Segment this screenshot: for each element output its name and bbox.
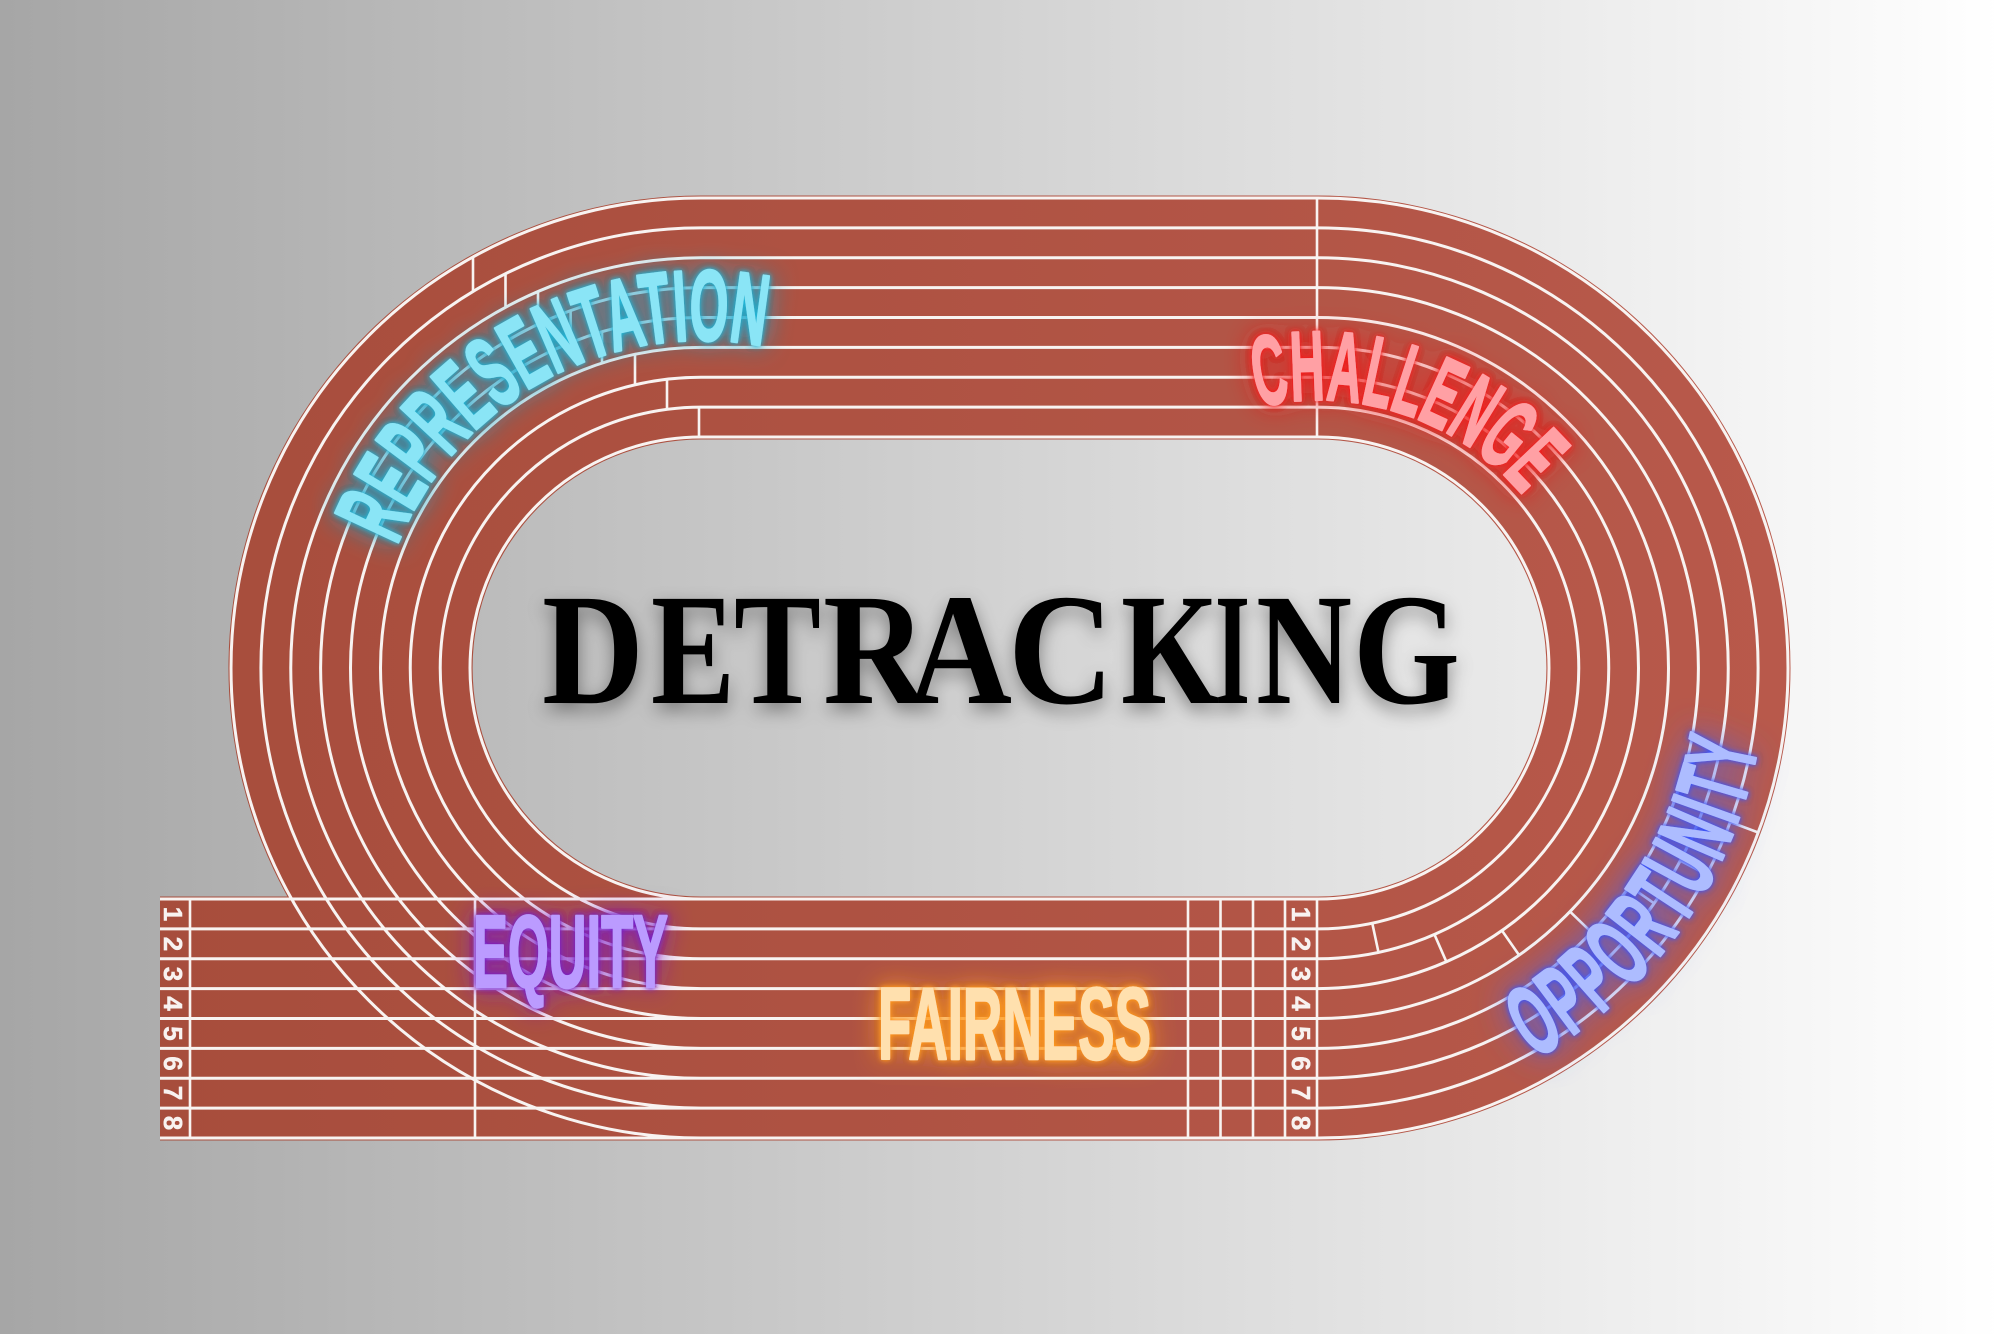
- title: E: [651, 562, 735, 738]
- lane numbers left: 6: [158, 1056, 188, 1071]
- lane numbers right: 4: [1286, 996, 1316, 1011]
- word: challenge: CHALLENGE: [1231, 314, 1588, 510]
- title: N: [1256, 562, 1352, 738]
- lane numbers left: 5: [158, 1026, 188, 1041]
- title: K: [1121, 562, 1219, 738]
- track surface: [160, 195, 1790, 1140]
- lane numbers left: 7: [158, 1086, 188, 1100]
- title: D: [542, 562, 644, 738]
- title: R: [823, 562, 929, 738]
- lane numbers left: 2: [158, 937, 188, 951]
- lane numbers right: 8: [1286, 1116, 1316, 1130]
- title: G: [1353, 562, 1460, 738]
- lane numbers left: [158, 907, 188, 1130]
- lane numbers left: 4: [158, 996, 188, 1011]
- lane numbers right: 7: [1286, 1086, 1316, 1100]
- title: T: [734, 562, 821, 738]
- title: C: [1008, 562, 1114, 738]
- start and finish marks: [190, 198, 1758, 1138]
- lane numbers right: 6: [1286, 1056, 1316, 1071]
- word: equity: EQUITY: [473, 894, 668, 1009]
- lane numbers left: 1: [158, 907, 188, 921]
- lane numbers right: 2: [1286, 937, 1316, 951]
- word: opportunity: OPPORTUNITY: [1486, 716, 1768, 1072]
- lane lines: [160, 198, 1788, 1138]
- lane numbers right: 3: [1286, 967, 1316, 981]
- title: A: [908, 562, 1012, 738]
- lane numbers left: 8: [158, 1116, 188, 1130]
- lane numbers right: 5: [1286, 1026, 1316, 1041]
- word: fairness: FAIRNESS: [878, 967, 1151, 1081]
- lane numbers right: [1286, 907, 1316, 1130]
- lane numbers left: 3: [158, 967, 188, 981]
- title: I: [1215, 562, 1250, 738]
- word: representation: REPRESENTATION: [318, 252, 790, 560]
- lane numbers right: 1: [1286, 907, 1316, 921]
